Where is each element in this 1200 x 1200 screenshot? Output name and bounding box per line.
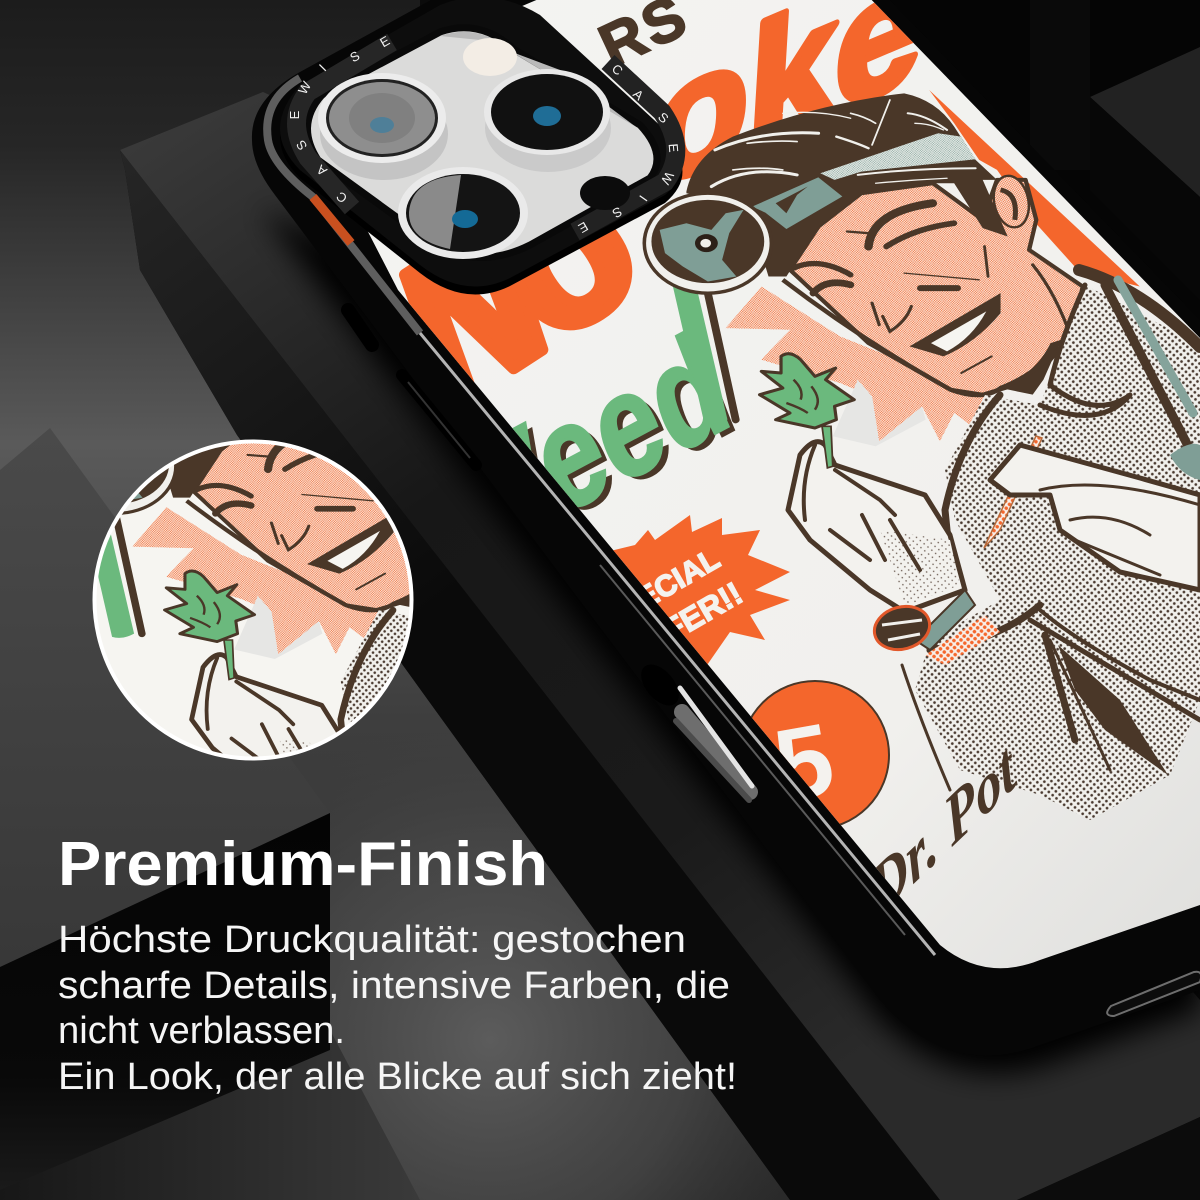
printed back <box>368 0 1200 968</box>
title: Premium-Finish <box>58 830 548 899</box>
price badge <box>750 680 890 826</box>
wordmark: CASEWISE: E <box>666 143 681 153</box>
side switch slit <box>348 310 372 345</box>
side button <box>634 658 752 800</box>
signature: Dr. Pot <box>863 726 1023 933</box>
body text: nicht verblassen. <box>58 1010 345 1052</box>
wordmark: CASEWISE: C <box>609 61 626 78</box>
wordmark: CASEWISE: A <box>313 162 330 179</box>
bottom port <box>1107 972 1200 1016</box>
wordmark: CASEWISE: C <box>333 189 350 206</box>
badge: special offer: SPECIAL <box>596 542 726 636</box>
wordmark: CASEWISE: E <box>287 110 302 119</box>
wordmark: CASEWISE: S <box>655 109 672 126</box>
camera island <box>280 0 682 294</box>
wordmark: CASEWISE: E <box>575 219 591 236</box>
detail magnifier circle <box>92 440 414 760</box>
wordmark: CASEWISE: S <box>347 48 363 65</box>
lens: top left <box>318 73 448 180</box>
body text: scharfe Details, intensive Farben, die <box>58 965 730 1007</box>
wordmark: CASEWISE: E <box>377 33 393 50</box>
badge: special offer <box>613 515 790 664</box>
microphone <box>580 176 630 210</box>
body text <box>58 919 737 1098</box>
wordmark: CASEWISE: I <box>636 193 651 204</box>
phone shadow <box>262 210 1200 1073</box>
orange strip seen through bumper <box>313 197 351 243</box>
wordmark: CASEWISE: W <box>295 78 314 97</box>
wordmark: CASEWISE <box>287 33 681 236</box>
headline: Weed: Weed <box>418 301 746 596</box>
phone body <box>252 0 1200 1056</box>
wordmark: CASEWISE: S <box>609 204 625 221</box>
headline: Weed: Weed <box>425 305 753 600</box>
headline: Weed <box>512 331 736 510</box>
body text: Höchste Druckqualität: gestochen <box>58 919 686 961</box>
volume button slit <box>402 375 476 465</box>
headline: Wow: Wo <box>316 132 668 469</box>
lens: top right <box>484 69 611 172</box>
wordmark: CASEWISE: A <box>630 86 647 103</box>
lens: bottom <box>398 167 528 259</box>
wordmark: CASEWISE: I <box>316 61 329 74</box>
wordmark: CASEWISE: W <box>658 169 677 188</box>
wordmark: CASEWISE: S <box>293 137 310 153</box>
body text: Ein Look, der alle Blicke auf sich zieht! <box>58 1056 737 1098</box>
flash <box>463 38 517 76</box>
badge: special offer: OFFER!! <box>618 575 748 671</box>
illustration: doctor <box>644 90 1200 820</box>
lettered ring segments <box>296 42 392 208</box>
price badge: 35 <box>710 701 842 833</box>
